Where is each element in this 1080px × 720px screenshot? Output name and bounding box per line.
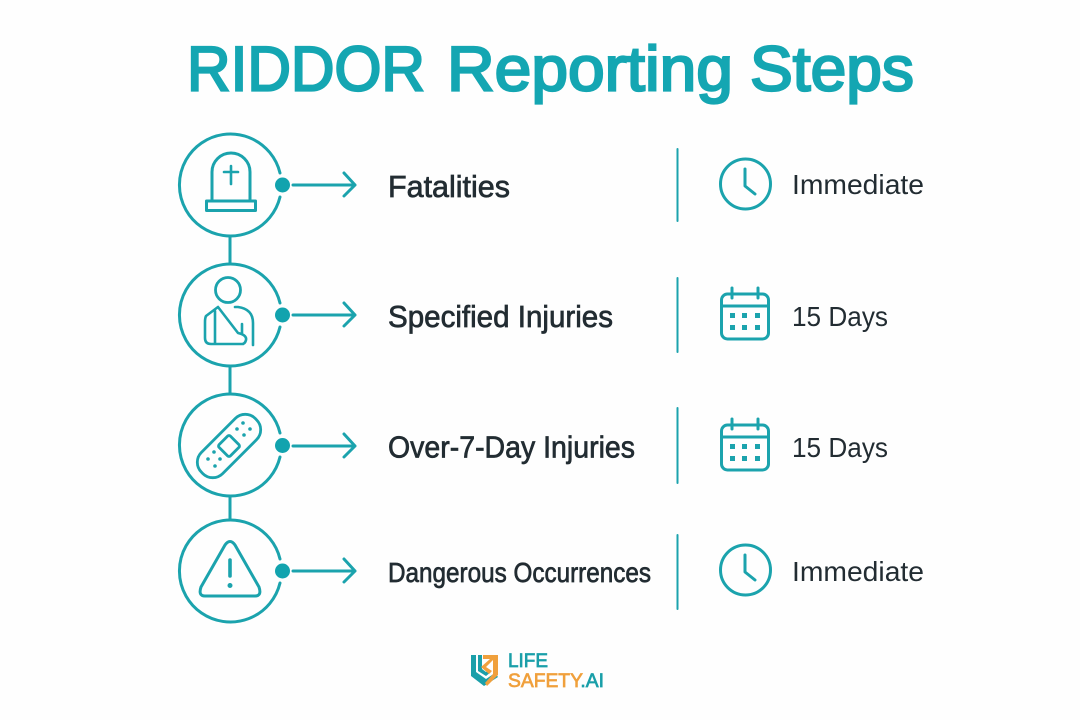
logo text: life: LIFE [508, 651, 548, 672]
icon: calendar [722, 288, 768, 339]
arrow [275, 173, 355, 196]
step 4: dangerous occurrences [179, 520, 924, 622]
time: 15 days: 15 Days [792, 432, 888, 463]
logo text: safety.ai: SAFETY.AI [508, 671, 604, 692]
icon: bandage in circle [179, 394, 280, 496]
title [187, 34, 914, 104]
title: RIDDOR [187, 34, 425, 104]
timeline connectors [228, 237, 232, 519]
step 2: specified injuries [179, 264, 888, 366]
title: Reporting [447, 34, 733, 104]
label: dangerous occurrences: Dangerous Occurrences [388, 557, 651, 588]
time: immediate: Immediate [792, 556, 924, 587]
divider [676, 149, 678, 221]
arrow [275, 559, 355, 582]
divider [676, 408, 678, 483]
label: specified injuries: Specified Injuries [388, 299, 613, 334]
label: fatalities: Fatalities [388, 169, 510, 204]
icon: clock [720, 545, 770, 595]
icon: clock [720, 159, 770, 209]
arrow [275, 303, 355, 326]
icon: gravestone in circle [179, 134, 280, 236]
logo [471, 651, 604, 692]
icon: calendar [722, 419, 768, 470]
step 1: fatalities [179, 134, 924, 236]
title: Steps [750, 34, 914, 104]
time: 15 days: 15 Days [792, 301, 888, 332]
icon: warning triangle in circle [179, 520, 280, 622]
label: over-7-day injuries: Over-7-Day Injuries [388, 430, 635, 464]
arrow [275, 434, 355, 457]
time: immediate: Immediate [792, 169, 924, 200]
divider [676, 535, 678, 609]
icon: shield [471, 655, 498, 686]
icon: person with arm sling in circle [179, 264, 280, 366]
step 3: over-7-day injuries [179, 394, 888, 496]
divider [676, 278, 678, 352]
